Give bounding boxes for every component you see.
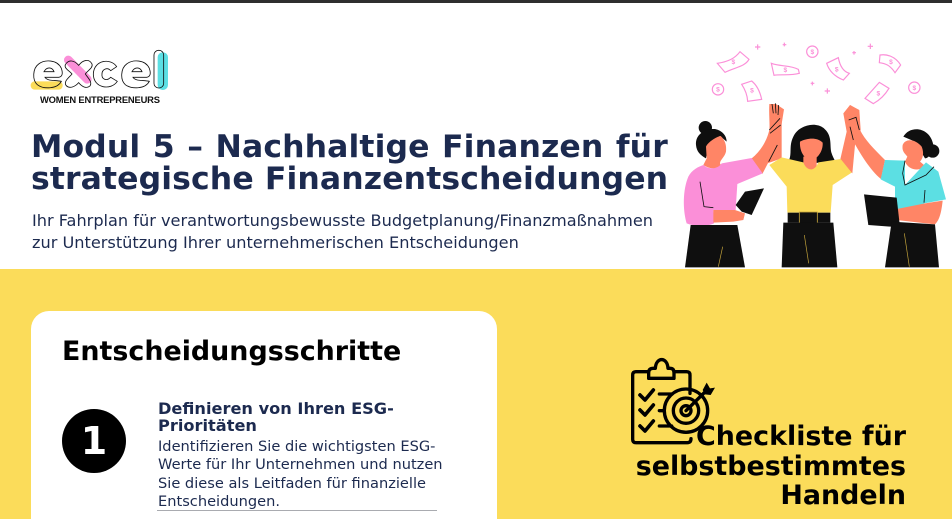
title: strategische Finanzentscheidungen <box>31 161 668 197</box>
money icons: $ <box>810 49 814 56</box>
panel heading: Entscheidungsschritte <box>62 336 401 367</box>
step text: Entscheidungen. <box>158 493 280 510</box>
icon: checklist with target <box>631 358 715 444</box>
step heading: Prioritäten <box>158 416 257 435</box>
illustration: three women high-five with money <box>684 42 946 268</box>
money icons: $ <box>912 85 916 92</box>
subtitle <box>32 211 653 252</box>
title <box>31 129 668 197</box>
checklist heading: selbstbestimmtes <box>636 450 906 482</box>
left woman <box>684 103 784 267</box>
money icons: $ <box>716 87 720 94</box>
checklist heading: Handeln <box>780 480 906 511</box>
top dark bar <box>0 0 952 3</box>
money icons: $ <box>889 59 893 66</box>
money icons: $ <box>750 87 754 94</box>
checklist heading: Checkliste für <box>696 421 906 452</box>
panel: Entscheidungsschritte <box>31 311 497 519</box>
step text: Werte für Ihr Unternehmen und nutzen <box>158 456 443 473</box>
money icons: $ <box>731 59 735 66</box>
yellow section background <box>0 269 952 519</box>
step divider <box>157 510 437 511</box>
money icons: $ <box>783 67 787 74</box>
logo: excel women entrepreneurs <box>30 50 168 105</box>
money icons <box>712 43 920 104</box>
right woman <box>847 105 946 267</box>
money icons: $ <box>835 66 839 73</box>
step number badge: 1 <box>81 419 107 463</box>
logo: excel women entrepreneurs: WOMEN ENTREPRENEURS <box>40 94 160 105</box>
subtitle: zur Unterstützung Ihrer unternehmerischen Entscheidungen <box>32 233 519 252</box>
step text <box>158 438 443 510</box>
step text: Sie diese als Leitfaden für finanzielle <box>158 475 426 492</box>
money icons: $ <box>876 91 880 98</box>
subtitle: Ihr Fahrplan für verantwortungsbewusste Budgetplanung/Finanzmaßnahmen <box>32 211 653 230</box>
checklist heading <box>636 421 906 511</box>
step text: Identifizieren Sie die wichtigsten ESG- <box>158 438 435 455</box>
center woman <box>767 105 861 267</box>
step heading: Definieren von Ihren ESG- <box>158 399 394 418</box>
step number badge <box>62 409 126 473</box>
title: Modul 5 – Nachhaltige Finanzen für <box>31 129 668 165</box>
step heading <box>158 399 394 435</box>
